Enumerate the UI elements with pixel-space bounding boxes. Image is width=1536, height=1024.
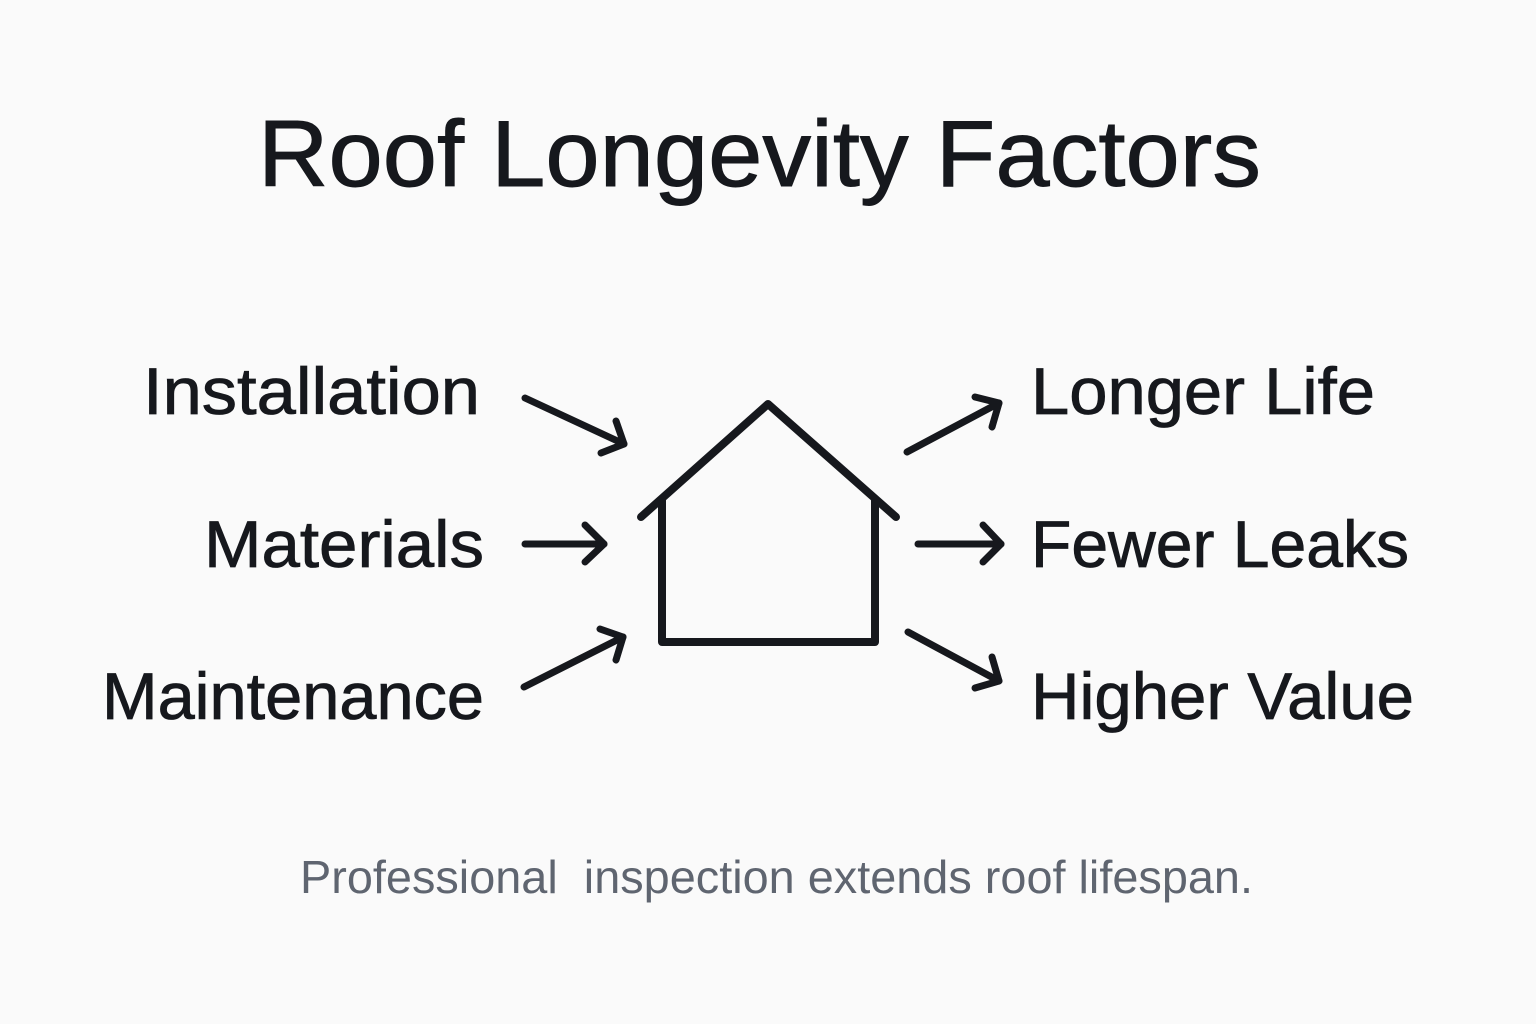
label: Longer Life: Longer Life [1031, 354, 1375, 428]
arrow: Installation to house [525, 398, 624, 453]
arrow: house to Longer Life [907, 397, 999, 452]
arrow: house to Fewer Leaks [918, 525, 1001, 562]
icon: house outline [641, 404, 896, 642]
arrow: Materials to house [525, 525, 604, 562]
label: Fewer Leaks: Fewer Leaks [1031, 507, 1409, 581]
title: Roof Longevity Factors [258, 101, 1261, 206]
arrow: house to Higher Value [908, 632, 999, 688]
arrow: Maintenance to house [524, 629, 623, 687]
label: Higher Value: Higher Value [1031, 659, 1414, 733]
label: Installation: Installation [143, 354, 480, 428]
label: Materials: Materials [204, 507, 484, 581]
footer note: Professional inspection extends roof lifespan. [300, 851, 1253, 903]
label: Maintenance: Maintenance [102, 659, 484, 733]
